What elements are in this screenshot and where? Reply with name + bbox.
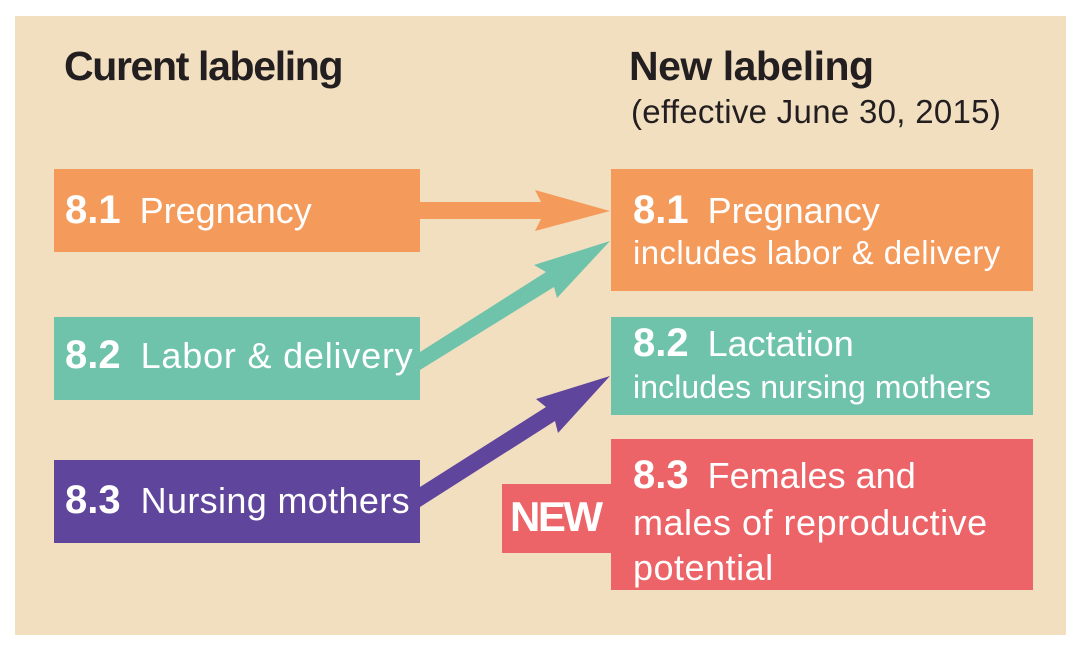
box: current 8.2 labor and delivery: 8.2 xyxy=(65,333,121,377)
tag: NEW xyxy=(502,484,611,553)
box: new 8.2 lactation: Lactation xyxy=(708,323,854,364)
box: current 8.3 nursing mothers: 8.3 xyxy=(65,478,121,522)
box: new 8.3 females and males xyxy=(611,439,1033,590)
heading: new labeling: New labeling xyxy=(629,43,874,89)
tag: NEW: NEW xyxy=(510,493,600,540)
box: current 8.3 nursing mothers: Nursing mothers xyxy=(141,480,410,521)
box: new 8.1 pregnancy: Pregnancy xyxy=(708,190,880,231)
box: new 8.1 pregnancy xyxy=(611,169,1033,291)
box: current 8.2 labor and delivery: Labor & delivery xyxy=(141,335,414,376)
box: current 8.2 labor and delivery xyxy=(54,317,420,400)
arrow: nursing to lactation xyxy=(420,376,610,507)
box: new 8.1 pregnancy: 8.1 xyxy=(633,188,689,232)
text: effective date: (effective June 30, 2015) xyxy=(631,93,1001,130)
box: current 8.1 pregnancy xyxy=(54,169,420,252)
box: new 8.1 pregnancy: includes labor & delivery xyxy=(633,234,1001,271)
box: current 8.3 nursing mothers xyxy=(54,460,420,543)
arrow: pregnancy to pregnancy xyxy=(420,190,610,231)
box: new 8.3 females and males: potential xyxy=(633,547,774,588)
arrow: labor to pregnancy xyxy=(420,241,610,370)
box: new 8.2 lactation xyxy=(611,317,1033,415)
box: new 8.3 females and males: 8.3 xyxy=(633,453,689,497)
box: new 8.2 lactation: 8.2 xyxy=(633,321,689,365)
box: current 8.1 pregnancy: Pregnancy xyxy=(140,190,312,231)
box: new 8.2 lactation: includes nursing mothers xyxy=(633,369,991,405)
box: current 8.1 pregnancy: 8.1 xyxy=(65,188,121,232)
box: new 8.3 females and males: males of reproductive xyxy=(633,502,988,543)
box: new 8.3 females and males: Females and xyxy=(708,455,916,496)
heading: current labeling: Curent labeling xyxy=(64,43,342,89)
